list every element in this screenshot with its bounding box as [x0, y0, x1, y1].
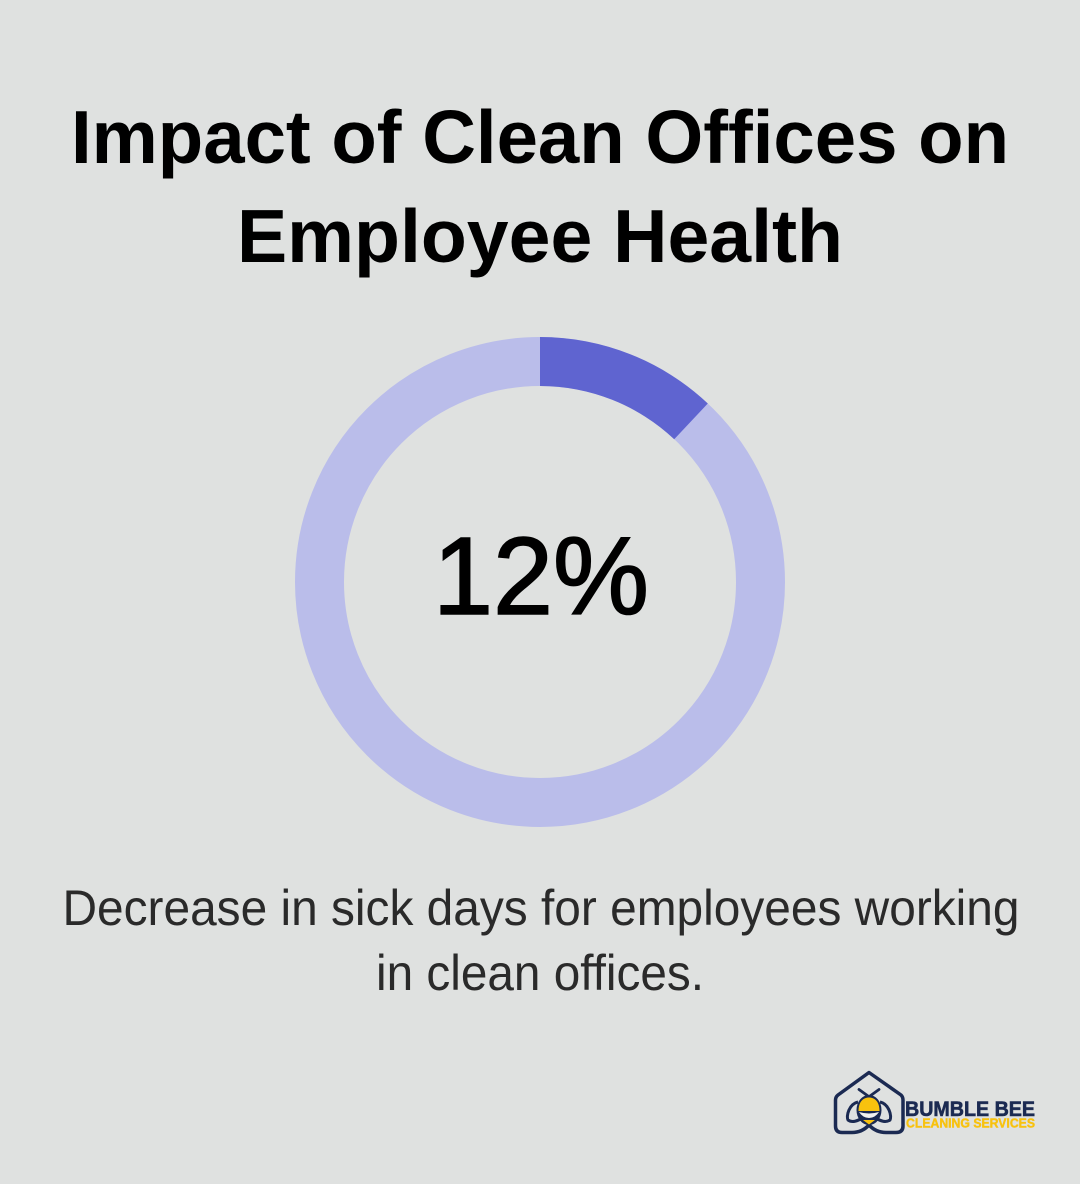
description: Decrease in sick days for employees working	[62, 880, 1020, 936]
big number: 12%	[433, 515, 649, 638]
title: Employee Health	[237, 194, 843, 278]
logo name: BUMBLE BEE	[905, 1098, 1035, 1121]
logo: Bumble Bee Cleaning Services	[836, 1072, 1035, 1132]
description	[62, 880, 1020, 1001]
description: in clean offices.	[376, 945, 704, 1001]
title	[71, 95, 1009, 278]
icon: house with bee	[836, 1072, 903, 1132]
logo tagline: CLEANING SERVICES	[906, 1116, 1035, 1130]
donut chart: 12%	[320, 337, 760, 802]
title: Impact of Clean Offices on	[71, 95, 1009, 179]
